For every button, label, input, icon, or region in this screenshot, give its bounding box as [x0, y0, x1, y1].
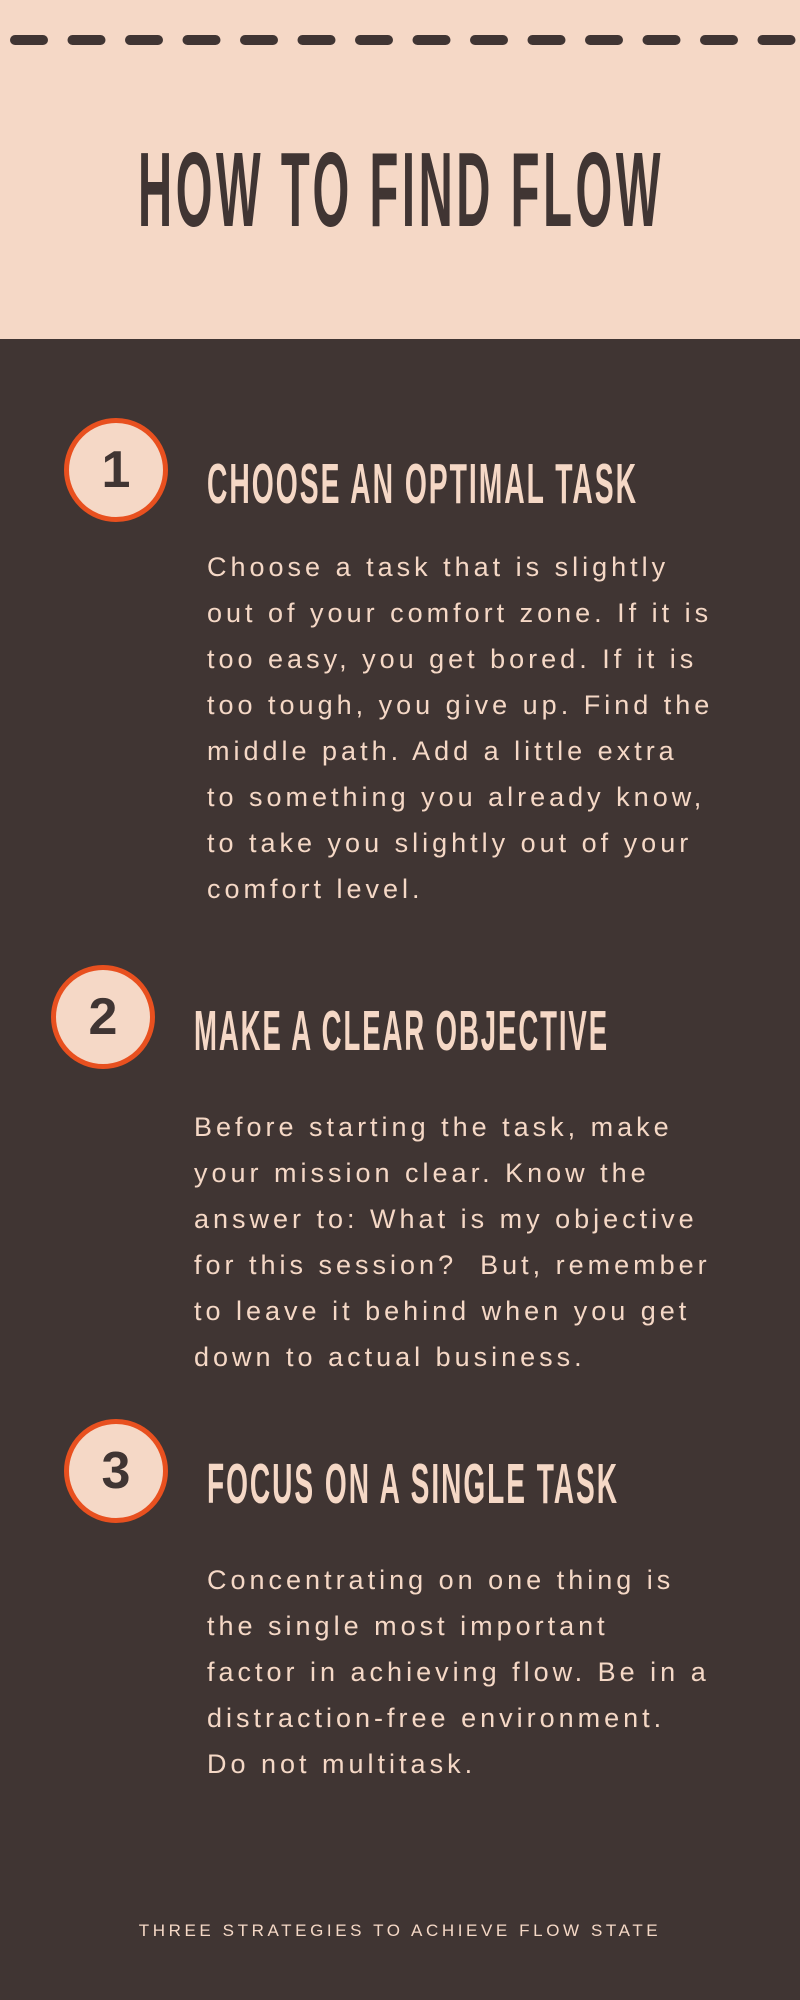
icon: number 2 [51, 965, 155, 1069]
body text 1 [207, 552, 713, 904]
footer caption: THREE STRATEGIES TO ACHIEVE FLOW STATE [139, 1921, 661, 1940]
body text 1: to take you slightly out of your [207, 828, 692, 858]
body text 2: answer to: What is my objective [194, 1204, 698, 1234]
icon: number 1 [64, 418, 168, 522]
body text 2: down to actual business. [194, 1342, 586, 1372]
body text 3: distraction-free environment. [207, 1703, 665, 1733]
body text 2: for this session? But, remember [194, 1250, 711, 1280]
body text 2: your mission clear. Know the [194, 1158, 650, 1188]
body text 2: to leave it behind when you get [194, 1296, 690, 1326]
body text 1: to something you already know, [207, 782, 705, 812]
body text 1: out of your comfort zone. If it is [207, 598, 712, 628]
icon: number 3 [64, 1419, 168, 1523]
step 1 [64, 418, 713, 904]
header band [0, 0, 800, 339]
body text 1: middle path. Add a little extra [207, 736, 678, 766]
step 2 [51, 965, 711, 1372]
icon: number 1: 1 [102, 441, 130, 499]
body text 3 [207, 1565, 710, 1779]
body text 1: too easy, you get bored. If it is [207, 644, 697, 674]
body text 3: factor in achieving flow. Be in a [207, 1657, 710, 1687]
body text 3: the single most important [207, 1611, 609, 1641]
body text 3: Do not multitask. [207, 1749, 476, 1779]
body text 2 [194, 1112, 711, 1372]
icon: number 2: 2 [89, 988, 117, 1046]
body text 1: Choose a task that is slightly [207, 552, 669, 582]
icon: number 3: 3 [102, 1442, 130, 1500]
body text 1: too tough, you give up. Find the [207, 690, 713, 720]
step 3 [64, 1419, 710, 1779]
body text 2: Before starting the task, make [194, 1112, 673, 1142]
body text 1: comfort level. [207, 874, 424, 904]
body text 3: Concentrating on one thing is [207, 1565, 674, 1595]
